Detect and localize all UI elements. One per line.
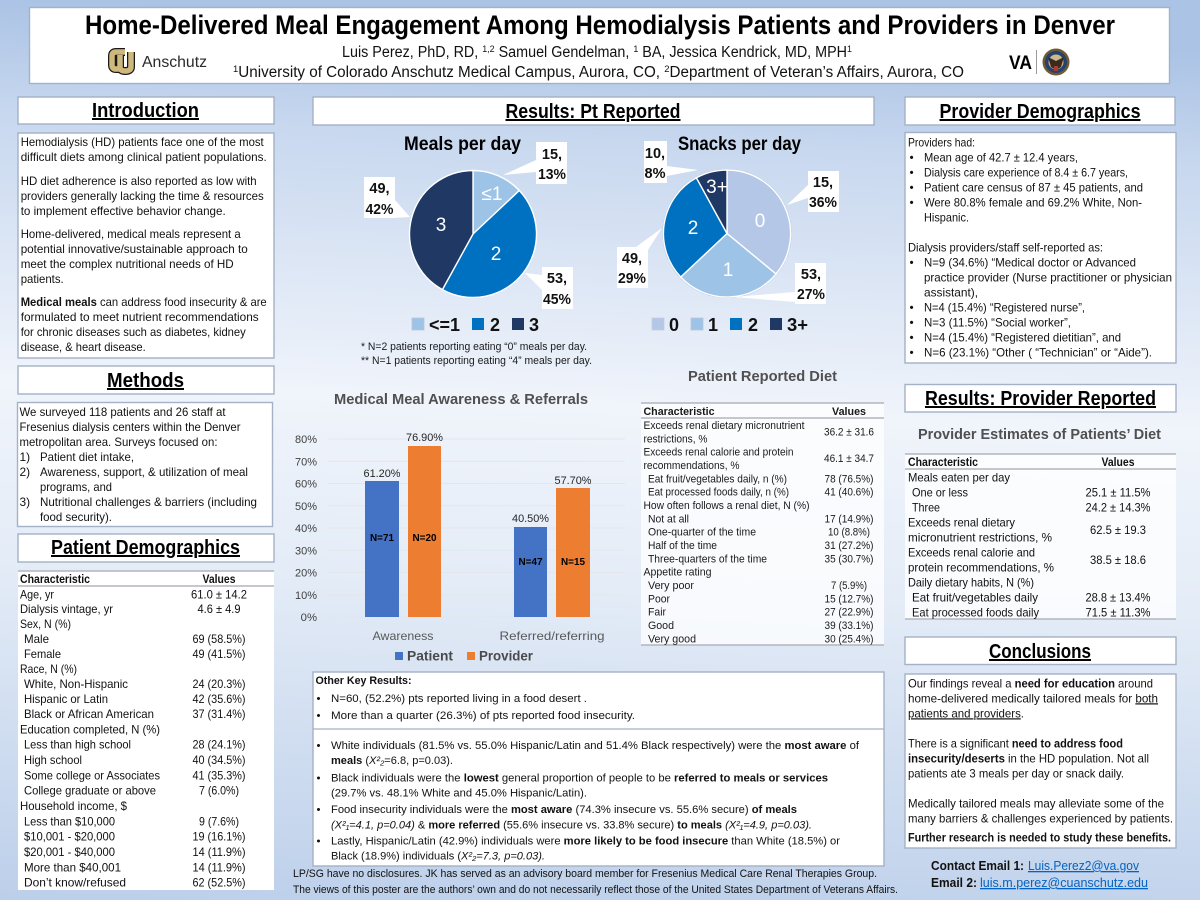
panel: conclusions text: Our findings reveal a need for education around [908, 676, 1153, 690]
panel: methods text [18, 402, 272, 526]
logo: VA seal: VA [1009, 53, 1032, 74]
panel: other key results: • [316, 836, 320, 848]
table: patient demographics: Male [24, 632, 49, 646]
panel: provider demographics text: N=6 (23.1%) “Other ( “Technician” or “Aide”). [924, 345, 1152, 359]
table: patient demographics: 37 (31.4%) [192, 707, 246, 721]
table: patient reported diet: 39 (33.1%) [824, 620, 874, 632]
heading: Provider Demographics [905, 97, 1175, 125]
table: provider estimates of patients' diet: Values [1102, 455, 1135, 469]
panel: other key results: (29.7% vs. 48.1% White and 45.0% Hispanic/Latin). [331, 787, 587, 799]
callout: 49, 42% [364, 177, 410, 218]
callout: 53, 45% [525, 267, 573, 309]
panel: methods text: 2) [20, 465, 30, 479]
panel: provider demographics text: N=3 (11.5%) “Social worker”, [924, 315, 1071, 329]
panel: conclusions text [905, 674, 1176, 848]
panel: introduction text: meet the complex nutritional needs of HD [21, 257, 234, 271]
affiliations: University of Colorado Anschutz Medical Campus, Aurora, CO, [238, 64, 664, 81]
panel: methods text: Awareness, support, & utilization of meal [40, 465, 248, 479]
table: patient reported diet: Eat processed foods daily, n (%) [648, 487, 789, 499]
legend: snacks: 2 [748, 315, 758, 335]
logo: CU Anschutz: Anschutz [142, 54, 207, 71]
heading: Patient Demographics [18, 534, 274, 562]
chart: meals per day pie [364, 134, 573, 335]
table: patient demographics: 40 (34.5%) [192, 753, 246, 767]
panel: other key results: White individuals (81.5% vs. 55.0% Hispanic/Latin and 51.4% Black respectively) were the most aware of [331, 740, 860, 752]
footnotes: meals [361, 341, 592, 367]
panel: other key results: Food insecurity individuals were the most aware (74.3% insecure vs. 55.6% secure) of meals [331, 804, 797, 816]
panel: provider demographics text: Dialysis providers/staff self-reported as: [908, 240, 1103, 254]
chart: snacks per day pie: 3+ [706, 177, 728, 198]
callout: 15, 36% [787, 171, 839, 212]
heading: Results Pt Reported [313, 97, 874, 125]
table: patient demographics: Black or African American [24, 707, 154, 721]
table: patient demographics: Education completed, N (%) [20, 722, 160, 736]
callout: 49, 29%: 29% [618, 271, 646, 287]
panel: methods text: Nutritional challenges & barriers (including [40, 495, 257, 509]
table: patient demographics: 49 (41.5%) [192, 647, 246, 661]
panel: other key results: Lastly, Hispanic/Latin (42.9%) individuals were more likely to be food insecure than White (18.5%) or [331, 836, 840, 848]
heading: Introduction: Introduction [92, 100, 199, 122]
legend: meals: <=1 [429, 315, 460, 335]
table: patient demographics: 14 (11.9%) [192, 860, 246, 874]
table: patient reported diet: How often follows a renal diet, N (%) [644, 500, 810, 512]
pie title: Meals per day [404, 134, 521, 155]
table: patient demographics: Sex, N (%) [20, 617, 71, 631]
heading: Patient Demographics: Patient Demographics [51, 537, 240, 559]
table: patient demographics: 14 (11.9%) [192, 845, 246, 859]
table: patient demographics: Hispanic or Latin [24, 692, 108, 706]
panel: provider demographics text: Mean age of 42.7 ± 12.4 years, [924, 150, 1078, 164]
table: patient demographics: 42 (35.6%) [192, 692, 246, 706]
table: patient reported diet: Not at all [648, 513, 689, 525]
callout: 49, 42%: 49, [369, 181, 390, 197]
footnotes: meals: * N=2 patients reporting eating “0” meals per day. [361, 341, 587, 353]
table: patient reported diet: 46.1 ± 34.7 [824, 453, 874, 465]
table: provider estimates of patients' diet: 28.8 ± 13.4% [1086, 590, 1151, 604]
disclosures footer: LP/SG have no disclosures. JK has served as an advisory board member for Fresenius Medical Care Renal Therapies Group. [293, 868, 877, 880]
table: patient demographics: Don’t know/refused [24, 876, 126, 890]
legend: meals: 3 [529, 315, 539, 335]
table: patient reported diet: Very good [648, 633, 696, 645]
logo: VA seal [1009, 48, 1070, 76]
callout: 49, 29%: 49, [622, 251, 642, 267]
panel: introduction text: disease, & heart disease. [21, 340, 146, 354]
callout: 53, 27%: 53, [801, 267, 821, 283]
table: patient reported diet: 30 (25.4%) [824, 633, 874, 645]
chart: snacks per day pie: 1 [723, 260, 733, 281]
panel: other key results: Other Key Results: [316, 675, 412, 687]
authors: Luis Perez, PhD, RD, [342, 44, 487, 61]
table: patient reported diet: 41 (40.6%) [824, 487, 874, 499]
callout: 15, 13% [503, 142, 567, 184]
panel: provider demographics text: • [910, 345, 914, 359]
table: patient reported diet: 7 (5.9%) [831, 580, 867, 592]
table: patient demographics: Characteristic [20, 572, 90, 586]
panel: other key results: • [316, 772, 320, 784]
table: patient demographics: 62 (52.5%) [192, 876, 246, 890]
table: patient reported diet: Eat fruit/vegetables daily, n (%) [648, 473, 787, 485]
panel: provider demographics text: • [910, 330, 914, 344]
chart: meals per day pie: 2 [491, 244, 501, 265]
legend: snacks: 3+ [787, 315, 808, 335]
panel: provider demographics text: assistant), [924, 285, 978, 299]
table: patient reported diet: 17 (14.9%) [824, 513, 874, 525]
callout: 53, 45%: 45% [543, 292, 571, 308]
table: patient reported diet: Half of the time [648, 540, 717, 552]
footnotes: meals: ** N=1 patients reporting eating “4” meals per day. [361, 355, 592, 367]
table: patient reported diet: 27 (22.9%) [824, 607, 874, 619]
panel: provider demographics text: Providers had: [908, 135, 975, 149]
table: provider estimates of patients' diet: 71.5 ± 11.3% [1086, 605, 1151, 619]
authors: 1,2 [482, 44, 495, 55]
table title: patient reported diet: Patient Reported Diet [688, 368, 837, 385]
table: provider estimates of patients' diet: Exceeds renal calorie and [908, 546, 1035, 560]
callout: 15, 13%: 13% [538, 167, 566, 183]
callout: 49, 29% [617, 228, 662, 288]
table: provider estimates of patients' diet: 24.2 ± 14.3% [1086, 500, 1151, 514]
category labels: Referred/referring [500, 629, 604, 643]
table: patient demographics: Less than $10,000 [24, 814, 115, 828]
panel: provider demographics text: • [910, 180, 914, 194]
legend: meals [412, 315, 539, 335]
affiliations: 1 [233, 64, 238, 75]
panel: introduction text: providers generally lacking the time & resources [21, 189, 264, 203]
legend: meals: 2 [490, 315, 500, 335]
heading: Conclusions [905, 637, 1176, 664]
panel: provider demographics text: N=4 (15.4%) “Registered dietitian”, and [924, 330, 1121, 344]
panel: provider demographics text [905, 132, 1176, 363]
chart legend: Provider [479, 648, 534, 664]
table: patient reported diet: Poor [648, 593, 670, 605]
callout: 15, 36%: 15, [813, 175, 833, 191]
table: patient reported diet [641, 403, 884, 645]
table: patient reported diet: Very poor [648, 580, 694, 592]
panel: provider demographics text: • [910, 300, 914, 314]
panel: introduction text: to implement effective behavior change. [21, 204, 226, 218]
table: patient demographics: Household income, $ [20, 799, 127, 813]
panel: introduction text: Home-delivered, medical meals represent a [21, 227, 241, 241]
table: patient reported diet: Characteristic [644, 406, 714, 418]
panel: methods text: We surveyed 118 patients and 26 staff at [20, 405, 226, 419]
title banner [30, 8, 1170, 84]
callout: 10, 8%: 8% [644, 166, 666, 182]
contact emails: Email 2: [931, 875, 977, 890]
axis and gridlines [295, 434, 625, 624]
panel: introduction text: formulated to meet nutrient recommendations [21, 310, 259, 324]
table: patient demographics: 69 (58.5%) [192, 632, 246, 646]
table: patient demographics: Dialysis vintage, yr [20, 602, 113, 616]
table: patient demographics: College graduate or above [24, 784, 156, 798]
disclosures footer: The views of this poster are the authors’ own and do not necessarily reflect those of the United States Department of Veterans Affairs. [293, 884, 898, 896]
chart legend: Patient [407, 648, 454, 664]
panel: introduction text: potential innovative/sustainable approach to [21, 242, 248, 256]
bars: referred or referring: 40.50% [512, 513, 549, 525]
table: patient reported diet: Good [648, 620, 674, 632]
authors: 1 [633, 44, 638, 55]
panel: provider demographics text: • [910, 165, 914, 179]
heading: Results Provider Reported: Results: Provider Reported [925, 388, 1156, 410]
bars: referred or referring: N=15 [561, 557, 585, 568]
callout: 15, 36%: 36% [809, 195, 837, 211]
table: patient demographics: 4.6 ± 4.9 [198, 602, 241, 616]
contact emails: Luis.Perez2@va.gov [1028, 858, 1139, 873]
panel: provider demographics text: • [910, 315, 914, 329]
category labels: Awareness [372, 629, 434, 643]
panel: other key results: Black (18.9%) individuals (X²₂=7.3, p=0.03). [331, 851, 545, 863]
callout: 10, 8% [644, 141, 698, 183]
table: patient reported diet: recommendations, % [644, 460, 740, 472]
chart: meals per day pie: ≤1 [482, 184, 502, 205]
table: patient demographics: 41 (35.3%) [192, 768, 246, 782]
table: patient demographics: 7 (6.0%) [199, 784, 239, 798]
table: patient reported diet: Appetite rating [644, 567, 712, 579]
authors: Samuel Gendelman, [495, 44, 633, 61]
table: patient demographics: Some college or Associates [24, 768, 160, 782]
panel: methods text: programs, and [40, 480, 112, 494]
panel: methods text: 3) [20, 495, 30, 509]
table: patient reported diet: 78 (76.5%) [824, 473, 874, 485]
axis and gridlines: 70% [295, 456, 317, 468]
pie title: Snacks per day [678, 134, 801, 155]
category labels [372, 629, 604, 643]
panel: methods text: metropolitan area. Surveys focused on: [20, 435, 218, 449]
table: patient demographics [18, 571, 274, 890]
bars: awareness: N=71 [370, 533, 394, 544]
axis and gridlines: 60% [295, 478, 317, 490]
table: patient reported diet: Three-quarters of the time [648, 553, 767, 565]
bars: referred or referring [512, 475, 592, 617]
table: patient reported diet: Exceeds renal dietary micronutrient [644, 420, 804, 432]
heading: Methods: Methods [107, 370, 184, 392]
table: patient demographics: Values [202, 572, 236, 586]
table: patient demographics: 19 (16.1%) [192, 830, 246, 844]
panel: methods text: 1) [20, 450, 30, 464]
contact emails: luis.m.perez@cuanschutz.edu [980, 875, 1148, 890]
panel: conclusions text: Further research is needed to study these benefits. [908, 830, 1171, 844]
legend: snacks: 1 [708, 315, 718, 335]
panel: introduction text: patients. [21, 272, 64, 286]
bars: awareness: 76.90% [406, 432, 443, 444]
panel: other key results: • [316, 804, 320, 816]
panel: other key results: • [316, 710, 320, 722]
panel: introduction text [18, 133, 274, 358]
table: patient reported diet: restrictions, % [644, 433, 708, 445]
heading: Introduction [18, 97, 274, 124]
panel: conclusions text: many barriers & challenges experienced by patients. [908, 811, 1173, 825]
logo: CU Anschutz [112, 52, 207, 71]
callout: 49, 42%: 42% [366, 202, 394, 218]
table: patient reported diet: Exceeds renal calorie and protein [644, 447, 794, 459]
pie slices [662, 169, 792, 298]
bars: awareness [364, 432, 443, 617]
panel: provider demographics text: • [910, 255, 914, 269]
table: patient demographics: More than $40,001 [24, 860, 121, 874]
disclosures footer [293, 868, 898, 896]
panel: methods text: food security). [40, 510, 112, 524]
table: provider estimates of patients' diet: 62.5 ± 19.3 [1090, 523, 1146, 537]
table: patient demographics: Age, yr [20, 587, 54, 601]
table: patient demographics: 9 (7.6%) [199, 814, 239, 828]
table: patient demographics: $10,001 - $20,000 [24, 830, 115, 844]
table: provider estimates of patients' diet: Characteristic [908, 455, 978, 469]
chart: snacks per day pie: 2 [688, 218, 698, 239]
table: patient reported diet: Fair [648, 607, 666, 619]
panel: other key results [313, 672, 884, 866]
chart: meals per day pie: 3 [436, 215, 446, 236]
table: patient reported diet: 35 (30.7%) [824, 553, 874, 565]
axis and gridlines: 40% [295, 523, 317, 535]
axis and gridlines: 50% [295, 501, 317, 513]
panel: introduction text: for chronic diseases such as diabetes, kidney [21, 325, 246, 339]
table: patient reported diet: 31 (27.2%) [824, 540, 874, 552]
table: patient demographics: Female [24, 647, 61, 661]
title: Home-Delivered Meal Engagement Among Hemodialysis Patients and Providers in Denver [85, 10, 1115, 40]
affiliations: Department of Veteran’s Affairs, Aurora, CO [670, 64, 964, 81]
table: provider estimates of patients' diet: 38.5 ± 18.6 [1090, 553, 1146, 567]
callout: 53, 27%: 27% [797, 287, 825, 303]
bars: referred or referring: N=47 [518, 557, 543, 568]
table: patient reported diet: 10 (8.8%) [828, 527, 870, 539]
table: provider estimates of patients' diet: Eat fruit/vegetables daily [912, 590, 1038, 604]
table: patient reported diet: 15 (12.7%) [824, 593, 874, 605]
callout: 10, 8%: 10, [645, 146, 665, 162]
pie slices [410, 170, 537, 297]
bars: awareness: N=20 [412, 533, 437, 544]
table: provider estimates of patients' diet: Three [912, 500, 940, 514]
table: patient demographics: 28 (24.1%) [192, 737, 246, 751]
callout: 53, 45%: 53, [547, 271, 567, 287]
table: patient demographics: $20,001 - $40,000 [24, 845, 115, 859]
table title: provider estimates: Provider Estimates of Patients’ Diet [918, 426, 1161, 443]
panel: provider demographics text: • [910, 150, 914, 164]
table: provider estimates of patients' diet: Meals eaten per day [908, 470, 1010, 484]
panel: conclusions text: patients and providers. [908, 706, 1024, 720]
panel: provider demographics text: Were 80.8% female and 69.2% White, Non- [924, 195, 1142, 209]
panel: methods text: Patient diet intake, [40, 450, 134, 464]
panel: other key results: meals (X²₂=6.8, p=0.03). [331, 755, 453, 767]
panel: conclusions text: There is a significant need to address food [908, 736, 1123, 750]
panel: provider demographics text: N=9 (34.6%) “Medical doctor or Advanced [924, 255, 1136, 269]
panel: provider demographics text: practice provider (Nurse practitioner or physician [924, 270, 1172, 284]
table: patient reported diet: One-quarter of the time [648, 527, 756, 539]
panel: provider demographics text: Hispanic. [924, 210, 969, 224]
panel: provider demographics text: Patient care census of 87 ± 45 patients, and [924, 180, 1143, 194]
callout: 53, 27% [733, 263, 826, 304]
table: patient demographics: White, Non-Hispanic [24, 677, 128, 691]
chart: snacks per day pie [617, 134, 839, 335]
heading: Methods [18, 366, 274, 394]
table: patient reported diet: 36.2 ± 31.6 [824, 426, 874, 438]
axis and gridlines: 20% [295, 568, 317, 580]
table: patient demographics: 24 (20.3%) [192, 677, 246, 691]
axis and gridlines: 30% [295, 545, 317, 557]
authors: 1 [847, 44, 852, 55]
panel: conclusions text: insecurity/deserts in the HD population. Not all [908, 751, 1149, 765]
heading: Conclusions: Conclusions [989, 641, 1091, 663]
panel: other key results: Black individuals were the lowest general proportion of people to be referred to meals or services [331, 772, 828, 784]
panel: other key results: (X²₁=4.1, p=0.04) & more referred (55.6% insecure vs. 33.8% secure) to meals (X²₁=4.9, p=0.03). [331, 819, 812, 831]
table: patient demographics: High school [24, 753, 82, 767]
panel: introduction text: difficult diets among clinical patient populations. [21, 150, 267, 164]
table: patient demographics: Race, N (%) [20, 662, 77, 676]
table: patient demographics: 61.0 ± 14.2 [191, 587, 247, 601]
chart: medical meal awareness and referrals [295, 391, 625, 664]
panel: conclusions text: Medically tailored meals may alleviate some of the [908, 796, 1164, 810]
heading: Provider Demographics: Provider Demographics [940, 101, 1140, 123]
table: provider estimates of patients' diet: Eat processed foods daily [912, 605, 1039, 619]
bars: awareness: 61.20% [364, 468, 400, 480]
panel: introduction text: Hemodialysis (HD) patients face one of the most [21, 135, 264, 149]
chart: snacks per day pie: 0 [755, 211, 765, 232]
axis and gridlines: 10% [295, 590, 317, 602]
panel: provider demographics text: N=4 (15.4%) “Registered nurse”, [924, 300, 1085, 314]
panel: other key results: • [316, 693, 320, 705]
table: provider estimates of patients' diet: 25.1 ± 11.5% [1086, 485, 1151, 499]
legend: snacks [652, 315, 808, 335]
heading: Results Pt Reported: Results: Pt Reported [506, 101, 680, 123]
chart legend [395, 648, 534, 664]
panel: other key results: N=60, (52.2%) pts reported living in a food desert . [331, 693, 587, 705]
table: provider estimates of patients' diet: One or less [912, 485, 968, 499]
contact emails [931, 858, 1148, 890]
axis and gridlines: 80% [295, 434, 317, 446]
authors: BA, Jessica Kendrick, MD, MPH [638, 44, 847, 61]
panel: methods text: Fresenius dialysis centers within the Denver [20, 420, 241, 434]
panel: conclusions text: home-delivered medically tailored meals for both [908, 691, 1158, 705]
panel: other key results: More than a quarter (26.3%) of pts reported food insecurity. [331, 710, 635, 722]
panel: other key results: • [316, 740, 320, 752]
table: provider estimates of patients' diet: protein recommendations, % [908, 560, 1054, 574]
panel: provider demographics text: Dialysis care experience of 8.4 ± 6.7 years, [924, 165, 1128, 179]
panel: conclusions text: patients ate 3 meals per day or snack daily. [908, 766, 1124, 780]
legend: snacks: 0 [669, 315, 679, 335]
table: provider estimates of patients' diet: micronutrient restrictions, % [908, 530, 1052, 544]
bars: referred or referring: 57.70% [554, 475, 592, 487]
affiliations: 2 [664, 64, 670, 75]
table: provider estimates of patients' diet: Exceeds renal dietary [908, 515, 1015, 529]
contact emails: Contact Email 1: [931, 858, 1024, 873]
table: patient demographics: Less than high school [24, 737, 131, 751]
chart title: Medical Meal Awareness & Referrals [334, 391, 588, 408]
panel: introduction text: HD diet adherence is also reported as low with [21, 174, 257, 188]
table: provider estimates of patients' diet [905, 454, 1176, 619]
panel: provider demographics text: • [910, 195, 914, 209]
callout: 15, 13%: 15, [542, 147, 562, 163]
table: patient reported diet: Values [832, 406, 866, 418]
panel: introduction text: Medical meals can address food insecurity & are [21, 295, 267, 309]
axis and gridlines: 0% [301, 612, 317, 624]
table: provider estimates of patients' diet: Daily dietary habits, N (%) [908, 575, 1034, 589]
